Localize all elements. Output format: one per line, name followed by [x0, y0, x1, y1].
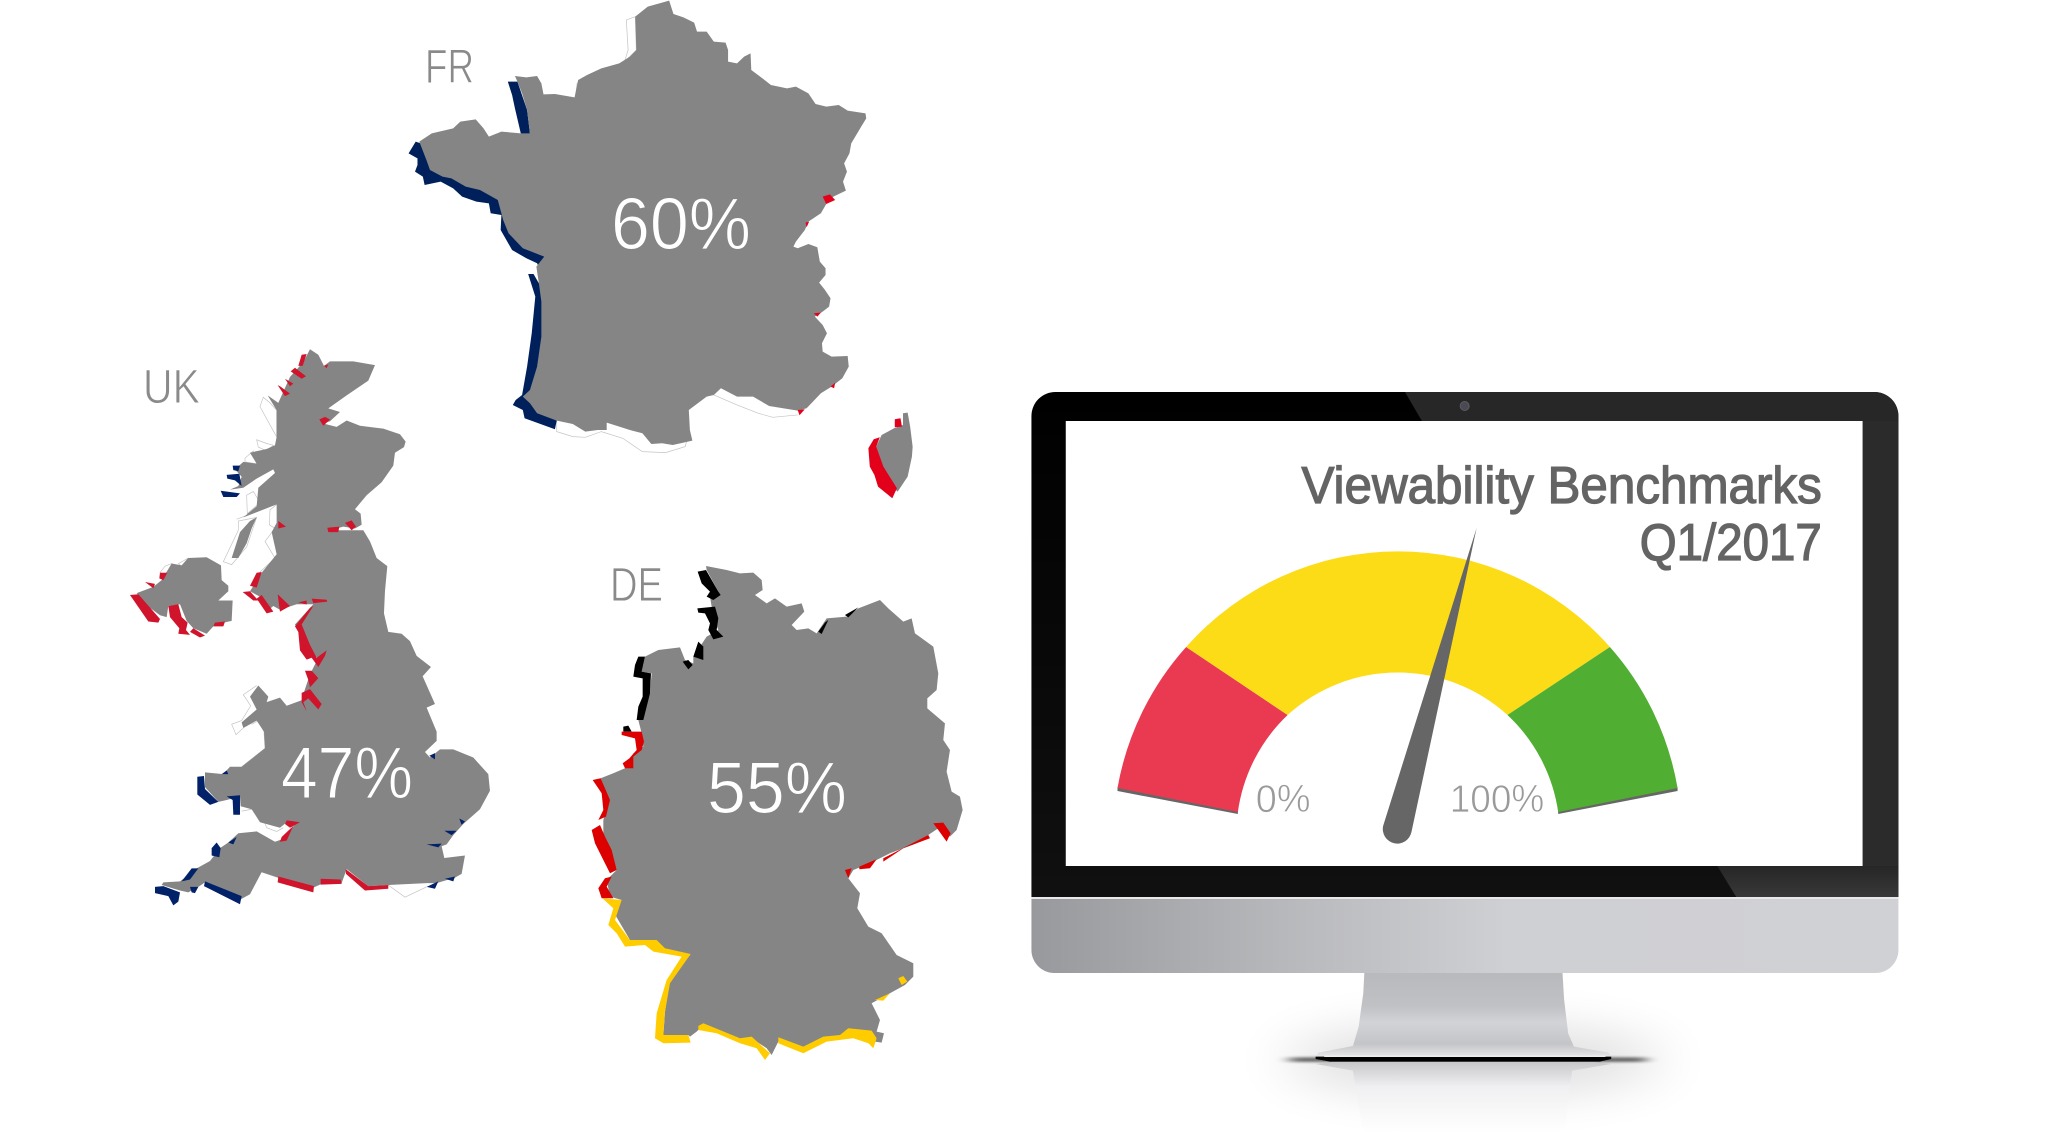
heading: Viewability Benchmarks: [1302, 456, 1822, 514]
France value: 60%: [611, 184, 751, 265]
Germany silhouette: [601, 566, 963, 1055]
Kintyre silhouette: [232, 517, 257, 558]
Corsica silhouette: [876, 413, 913, 492]
label: UK: UK: [143, 361, 200, 414]
monitor bezel: [1031, 392, 1898, 897]
label: FR: FR: [425, 41, 474, 94]
gauge: [1117, 528, 1678, 844]
Northern Ireland silhouette: [137, 557, 233, 634]
monitor: [1031, 392, 1898, 1133]
UK value: 47%: [281, 733, 413, 814]
France silhouette: [419, 1, 866, 445]
gauge segment: red: [1117, 647, 1288, 812]
bezel glare: [1405, 392, 1898, 897]
Great Britain silhouette: [162, 349, 490, 900]
gauge needle: [1383, 528, 1477, 844]
Germany value: 55%: [707, 748, 847, 829]
map: Germany: [592, 566, 963, 1060]
label: DE: DE: [610, 559, 663, 612]
map: United Kingdom: [130, 349, 490, 905]
monitor chin: [1031, 897, 1898, 973]
screen: [1066, 421, 1863, 866]
heading: Q1/2017: [1640, 513, 1822, 571]
webcam: [1460, 402, 1469, 410]
gauge base shadow: [1117, 787, 1678, 814]
heading: [1302, 456, 1822, 571]
map: France: [409, 1, 913, 498]
gauge scale: 0%: 0%: [1256, 778, 1310, 821]
gauge segment: green: [1507, 647, 1678, 812]
monitor stand and shadow: [1284, 972, 1663, 1133]
gauge segment: yellow: [1186, 551, 1610, 715]
gauge scale: 100%: 100%: [1450, 778, 1544, 821]
